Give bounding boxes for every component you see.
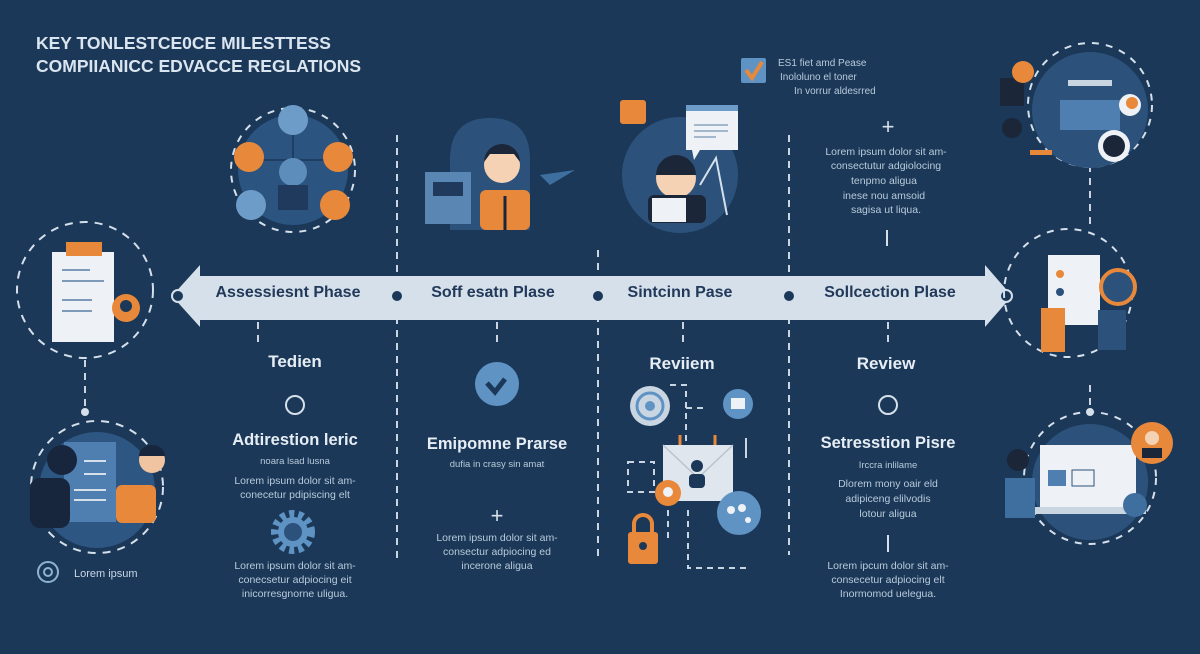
column 1 text [232,352,358,600]
column 2 text: + [491,503,503,528]
callout: top note [741,58,876,97]
callout: top note: ES1 fiet amd Pease [778,58,867,69]
text block: upper right: + [882,114,894,139]
column 2 text: Emipomne Prarse [427,435,567,453]
column 4 text [821,354,955,600]
phase labels [216,284,956,301]
column 1 text: conecsetur adpiocing eit [238,574,352,586]
phase labels: Soff esatn Plase [431,284,555,301]
phase labels: Sollcection Plase [824,284,956,301]
callout: lorem ipsum [38,562,138,582]
callout: lorem ipsum: Lorem ipsum [74,568,138,580]
column 1 text: Adtirestion leric [232,431,358,449]
phase labels: Sintcinn Pase [628,284,733,301]
callout: top note: Inololuno el toner [780,72,857,83]
phase labels: Assessiesnt Phase [216,284,361,301]
icon: person with laptop [425,118,575,230]
column 2 text [427,362,567,572]
icon: top-right dashboard circle [1000,43,1152,168]
column 2 text: Lorem ipsum dolor sit am- [436,532,558,544]
column 1 text: noara lsad lusna [260,456,331,467]
column 4 text: adipiceng elilvodis [845,493,931,505]
icon: team network [231,105,355,232]
column 4 text: Inormomod uelegua. [840,588,936,600]
column 1 text: Tedien [268,352,322,371]
column 4 text: consecetur adpiocing elt [831,574,945,586]
column 1 text: Lorem ipsum dolor sit am- [234,475,356,487]
icon: clipboard circle [17,222,153,358]
column 4 text: Lorem ipcum dolor sit am- [827,560,949,572]
icon: person with chat [620,100,738,233]
title: COMPIIANICC EDVACCE REGLATIONS [36,56,361,76]
title: KEY TONLESTCE0CE MILESTTESS [36,33,331,53]
column 2 text: consectur adpiocing ed [443,546,551,558]
column 2 text: dufia in crasy sin amat [450,459,545,470]
text block: upper right: tenpmo aligua [851,175,917,187]
column 2 text: incerone aligua [461,560,533,572]
column 4 text: Irccra inlilame [859,460,917,471]
text block: upper right [825,114,947,246]
timeline arrow band [172,265,1012,327]
title [36,33,361,76]
column 4 text: lotour aligua [859,508,917,520]
text block: upper right: consectutur adgiolocing [831,160,941,172]
icon: people discussing circle [30,408,165,553]
column 1 text: inicorresgnorne uligua. [242,588,348,600]
column 3: review icons: Reviiem [649,354,715,373]
icon: gear [275,514,311,550]
callout: top note: In vorrur aldesrred [794,86,876,97]
column 1 text: Lorem ipsum dolor sit am- [234,560,356,572]
column 4 text: Setresstion Pisre [821,434,955,452]
icon: checklist circle [1004,229,1135,357]
column 3: review icons [628,354,761,568]
text block: upper right: sagisa ut liqua. [851,204,921,216]
column 4 text: Dlorem mony oair eld [838,478,938,490]
text block: upper right: Lorem ipsum dolor sit am- [825,146,947,158]
icon: laptop circle [1005,408,1173,544]
text block: upper right: inese nou amsoid [843,190,925,202]
column 4 text: Review [857,354,916,373]
column 1 text: conecetur pdipiscing elt [240,489,350,501]
